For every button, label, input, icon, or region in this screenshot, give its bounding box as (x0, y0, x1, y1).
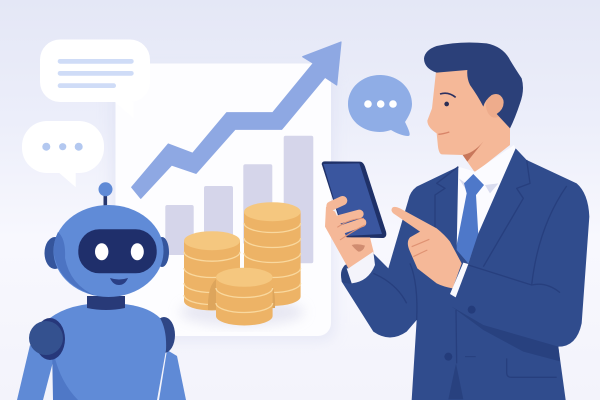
coin stack shadow (208, 276, 275, 310)
face and neck (427, 68, 510, 173)
callout: white dots bubble (22, 121, 104, 187)
arrow: rising trend (132, 42, 341, 198)
robot smile (110, 278, 128, 285)
lower jacket opening shadow (448, 363, 463, 399)
robot eyes (95, 243, 144, 260)
robot (17, 182, 186, 400)
left hand (325, 201, 374, 268)
callout: blue chat bubble (348, 75, 412, 136)
callout: white text bubble (40, 40, 150, 118)
hair (424, 42, 523, 128)
eye and brow (440, 93, 456, 106)
right shirt cuff (450, 263, 468, 297)
robot head (54, 205, 164, 297)
robot body (50, 303, 166, 400)
panel: chart card (110, 64, 336, 342)
shirt (454, 145, 517, 265)
robot head shade (54, 232, 96, 296)
left sleeve end (341, 265, 352, 284)
suit lapels and seams (373, 160, 567, 377)
robot visor (78, 229, 157, 273)
sleeve shadow (452, 307, 560, 361)
tie (456, 174, 484, 263)
left shirt cuff (347, 252, 375, 283)
businessman (322, 42, 589, 400)
bar chart (165, 136, 313, 263)
front coin stack (216, 268, 273, 326)
robot ears (44, 237, 169, 269)
tall coin stack (244, 202, 301, 306)
phone (322, 161, 386, 238)
robot arms (17, 345, 54, 400)
collar shade (459, 178, 498, 193)
neck shadow (463, 142, 483, 162)
robot neck (87, 296, 125, 310)
antenna (98, 182, 112, 207)
suit buttons (444, 306, 476, 361)
robot left shoulder (29, 318, 65, 360)
ear (486, 92, 504, 118)
left coin stack (184, 231, 240, 310)
mouth (438, 132, 449, 134)
robot body shade (52, 345, 78, 400)
pointing hand (391, 207, 462, 288)
robot right shoulder (153, 317, 175, 353)
suit (341, 148, 589, 400)
icon: stack of gold coins (180, 202, 304, 326)
